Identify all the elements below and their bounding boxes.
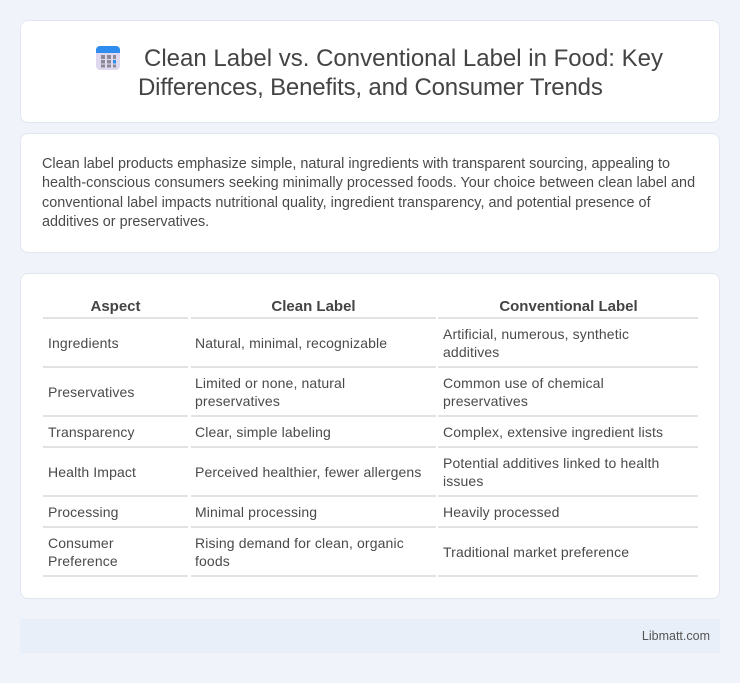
row: health impact: Perceived healthier, fewer allergens <box>195 464 421 480</box>
footer bar <box>20 619 720 653</box>
title <box>138 45 663 101</box>
row: consumer preference: Rising demand for clean, organic <box>195 535 404 551</box>
panel: title card <box>20 20 720 123</box>
panel: intro text: health-conscious consumers seeking minimally processed foods. Your choice between clean label and <box>42 175 695 191</box>
row: preservatives <box>48 375 604 409</box>
row: processing: Minimal processing <box>195 504 317 520</box>
panel: intro text <box>20 133 720 253</box>
row: processing <box>48 504 560 520</box>
title: Differences, Benefits, and Consumer Trends <box>138 74 603 101</box>
row: ingredients <box>48 326 629 360</box>
panel: comparison table <box>20 273 720 599</box>
row: transparency: Complex, extensive ingredient lists <box>443 424 663 440</box>
row: ingredients: Natural, minimal, recognizable <box>195 335 387 351</box>
table header: Conventional Label <box>499 298 638 315</box>
table header <box>90 298 638 315</box>
row: preservatives: Preservatives <box>48 384 134 400</box>
row: health impact: issues <box>443 473 483 489</box>
table header: Clean Label <box>271 298 356 315</box>
row: consumer preference: Preference <box>48 553 118 569</box>
icon: calendar <box>96 46 120 70</box>
row: consumer preference: Traditional market preference <box>443 544 629 560</box>
row: processing: Processing <box>48 504 119 520</box>
row: preservatives: preservatives <box>443 393 528 409</box>
row: preservatives: preservatives <box>195 393 280 409</box>
row: processing: Heavily processed <box>443 504 560 520</box>
row: health impact <box>48 455 659 489</box>
panel: intro text: additives or preservatives. <box>42 214 209 230</box>
panel: intro text: Clean label products emphasize simple, natural ingredients with transparent sourcing, appealing to <box>42 156 670 172</box>
footer text: Libmatt.com <box>642 629 710 643</box>
row: ingredients: additives <box>443 344 499 360</box>
row: consumer preference: foods <box>195 553 230 569</box>
row: transparency: Transparency <box>48 424 135 440</box>
row: transparency: Clear, simple labeling <box>195 424 331 440</box>
row: health impact: Health Impact <box>48 464 136 480</box>
row: preservatives: Limited or none, natural <box>195 375 345 391</box>
row: ingredients: Artificial, numerous, synthetic <box>443 326 629 342</box>
row: transparency <box>48 424 663 440</box>
row: ingredients: Ingredients <box>48 335 119 351</box>
row: consumer preference <box>48 535 629 569</box>
title: Clean Label vs. Conventional Label in Food: Key <box>144 45 663 72</box>
row: preservatives: Common use of chemical <box>443 375 604 391</box>
row: health impact: Potential additives linked to health <box>443 455 659 471</box>
table header: Aspect <box>90 298 141 315</box>
row: consumer preference: Consumer <box>48 535 114 551</box>
panel: intro text: conventional label impacts nutritional quality, ingredient transparency, and potential presence of <box>42 195 651 211</box>
